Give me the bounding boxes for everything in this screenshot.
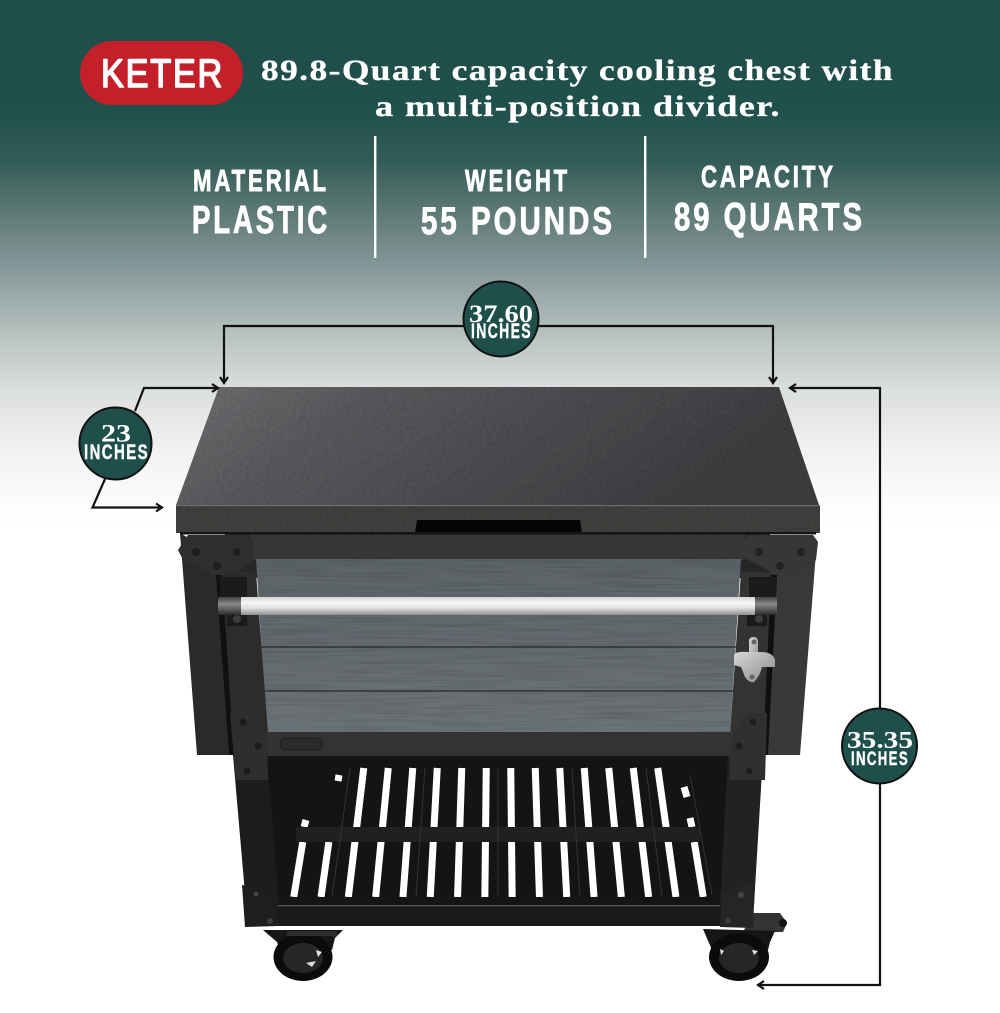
spec: weight: WEIGHT: [465, 163, 570, 198]
wood panel: [256, 559, 741, 733]
lid front edge: [176, 505, 820, 533]
handle mounts: [220, 577, 776, 626]
spec: material: MATERIAL: [193, 163, 329, 198]
spec: weight: [421, 163, 615, 243]
spec: material: [192, 163, 330, 242]
dimension: width: [220, 282, 777, 383]
dimension: width: INCHES: [471, 320, 532, 343]
dimension: depth: [80, 384, 218, 512]
lid highlight: [176, 505, 820, 506]
headline: a multi-position divider.: [375, 90, 781, 123]
inner left leg: [220, 572, 268, 733]
dimension: height: INCHES: [851, 748, 909, 770]
lower shelf back: [262, 755, 735, 905]
dimension: depth: 23: [101, 420, 131, 448]
outer left side panel: [180, 533, 229, 755]
left wheel: [263, 930, 343, 981]
headline: 89.8-Quart capacity cooling chest with: [261, 54, 894, 87]
lid underside shadow: [180, 532, 816, 534]
lower left leg: [233, 755, 279, 927]
divider: [644, 136, 646, 258]
left top bracket: [178, 535, 253, 575]
lower right leg: [720, 755, 763, 928]
handle bar: [218, 597, 777, 615]
shelf slat highlights: [332, 768, 712, 897]
lid top: [176, 387, 819, 505]
left lower bracket: [230, 713, 268, 780]
inner right leg: [730, 572, 776, 733]
divider: [374, 136, 376, 258]
right lower bracket: [730, 713, 767, 780]
shelf cross bar: [296, 827, 700, 842]
spec: capacity: 89 QUARTS: [674, 196, 865, 239]
right wheel with brake: [703, 913, 787, 981]
spec: material: PLASTIC: [192, 199, 330, 242]
panel seams: [261, 647, 736, 691]
spec: capacity: [674, 159, 865, 239]
headline: [261, 54, 894, 123]
dark gap right: [763, 575, 777, 755]
logo: Keter: [80, 41, 243, 105]
lid notch: [415, 520, 582, 533]
spec: capacity: CAPACITY: [701, 159, 836, 194]
dimension: height: 35.35: [847, 728, 913, 754]
dimension: depth: INCHES: [84, 441, 149, 464]
dimension: width: 37.60: [469, 301, 533, 328]
dark gap left: [216, 575, 234, 755]
cooler product illustration: [176, 387, 820, 981]
lower body band with logo: [266, 732, 731, 756]
shelf gaps: [294, 768, 703, 897]
bottle opener: [734, 637, 775, 682]
dimension: height: [758, 384, 917, 989]
right top bracket: [743, 535, 818, 575]
outer right side panel: [768, 540, 817, 755]
shelf front rail: [262, 897, 732, 926]
upper body band: [250, 533, 745, 560]
body backing: [225, 533, 770, 578]
logo: Keter: KETER: [101, 52, 224, 96]
spec: weight: 55 POUNDS: [421, 200, 615, 243]
